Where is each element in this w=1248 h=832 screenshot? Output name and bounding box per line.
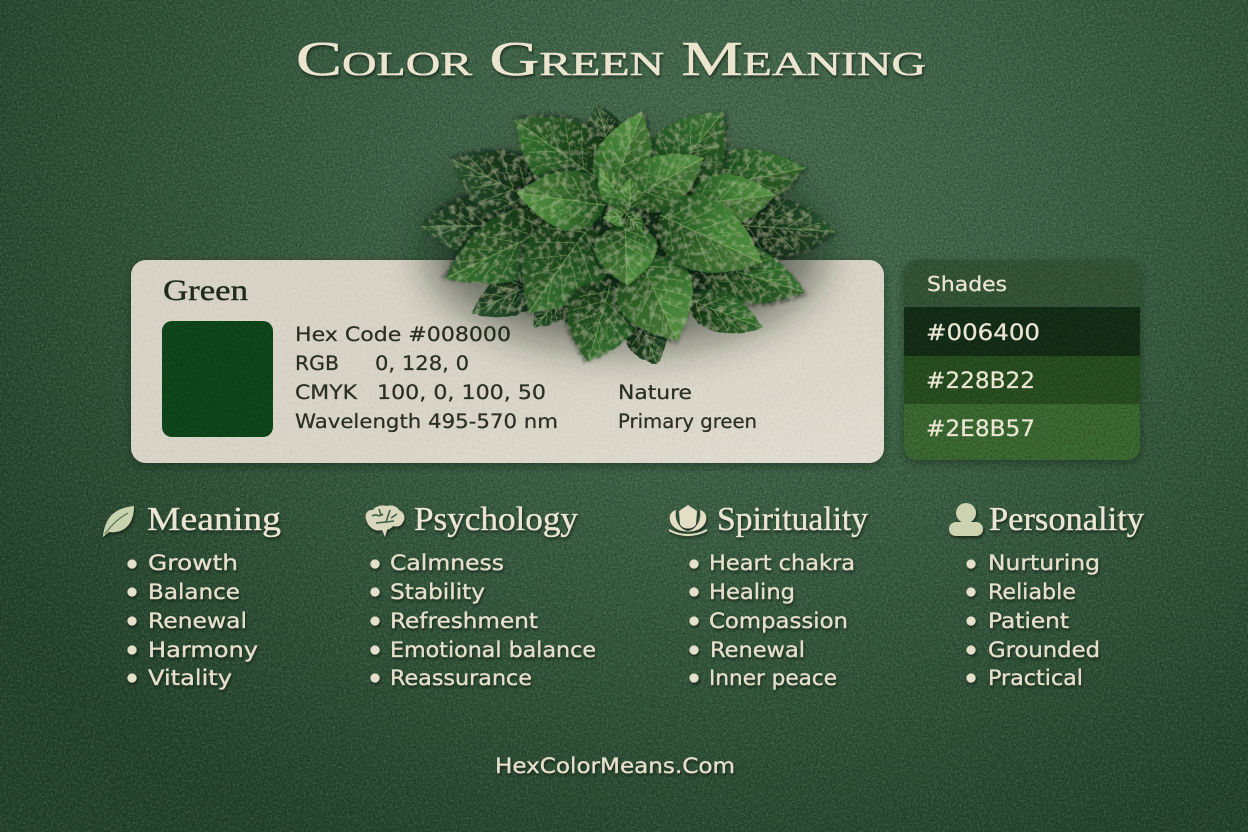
shade row 228B22 bbox=[904, 356, 1140, 404]
shade row 006400 bbox=[904, 307, 1140, 356]
list: spirituality: Healing bbox=[709, 580, 795, 604]
panel: shades bbox=[904, 260, 1140, 460]
shades labels: #228B22 bbox=[926, 369, 1035, 394]
list: personality: Practical bbox=[988, 666, 1083, 690]
list: personality: Nurturing bbox=[988, 551, 1100, 575]
column: spirituality bbox=[669, 501, 868, 690]
column: personality bbox=[949, 501, 1144, 690]
colour values: Hex Code #008000 bbox=[295, 323, 511, 346]
icon: green leaf plant bbox=[421, 88, 837, 372]
shades labels bbox=[926, 272, 1040, 442]
list: spirituality bbox=[690, 551, 855, 690]
list: psychology: Stability bbox=[390, 580, 485, 604]
list: psychology: Refreshment bbox=[390, 609, 538, 633]
icon: leaf bbox=[103, 506, 134, 537]
icon: brain bbox=[366, 505, 404, 537]
list: spirituality: Inner peace bbox=[709, 666, 837, 690]
colour swatch bbox=[162, 321, 273, 437]
shades labels: #2E8B57 bbox=[926, 417, 1035, 442]
list: psychology: Reassurance bbox=[390, 666, 532, 690]
list: personality: Grounded bbox=[988, 638, 1100, 662]
shades labels: #006400 bbox=[926, 321, 1040, 346]
list: personality bbox=[966, 551, 1100, 690]
panel: colour info card bbox=[131, 260, 884, 463]
colour values: CMYK bbox=[295, 381, 358, 404]
column: psychology bbox=[366, 501, 596, 690]
list: spirituality: Heart chakra bbox=[709, 551, 855, 575]
colour values: RGB bbox=[295, 352, 339, 375]
heading: spirituality: Spirituality bbox=[717, 501, 868, 538]
list: meaning: Harmony bbox=[148, 638, 258, 662]
title: Color Green Meaning bbox=[296, 31, 926, 86]
plant shadow bbox=[425, 150, 825, 350]
shade row 2E8B57 bbox=[904, 404, 1140, 460]
heading: psychology: Psychology bbox=[414, 501, 578, 538]
column: meaning bbox=[103, 501, 281, 690]
colour values: 0, 128, 0 bbox=[375, 352, 469, 375]
footer: HexColorMeans.Com bbox=[495, 754, 735, 778]
list: meaning: Vitality bbox=[148, 666, 232, 690]
list: psychology: Emotional balance bbox=[390, 638, 596, 662]
card heading: Green bbox=[163, 274, 248, 307]
colour values: Wavelength 495-570 nm bbox=[295, 410, 558, 433]
list: spirituality: Compassion bbox=[709, 609, 848, 633]
heading: meaning: Meaning bbox=[147, 501, 281, 538]
colour notes bbox=[618, 381, 757, 433]
colour notes: Primary green bbox=[618, 410, 757, 433]
colour values: 100, 0, 100, 50 bbox=[377, 381, 546, 404]
list: psychology: Calmness bbox=[390, 551, 504, 575]
shades header bbox=[904, 260, 1140, 307]
list: personality: Reliable bbox=[988, 580, 1076, 604]
list: meaning bbox=[128, 551, 258, 690]
colour values bbox=[295, 323, 558, 433]
colour notes: Nature bbox=[618, 381, 692, 404]
icon: person bbox=[949, 503, 983, 536]
list: meaning: Growth bbox=[148, 551, 238, 575]
list: meaning: Renewal bbox=[148, 609, 247, 633]
list: psychology bbox=[370, 551, 596, 690]
icon: lotus bbox=[669, 505, 707, 535]
list: meaning: Balance bbox=[148, 580, 240, 604]
shades labels: Shades bbox=[927, 272, 1007, 296]
heading: personality: Personality bbox=[989, 501, 1144, 538]
list: spirituality: Renewal bbox=[710, 638, 805, 662]
list: personality: Patient bbox=[988, 609, 1069, 633]
